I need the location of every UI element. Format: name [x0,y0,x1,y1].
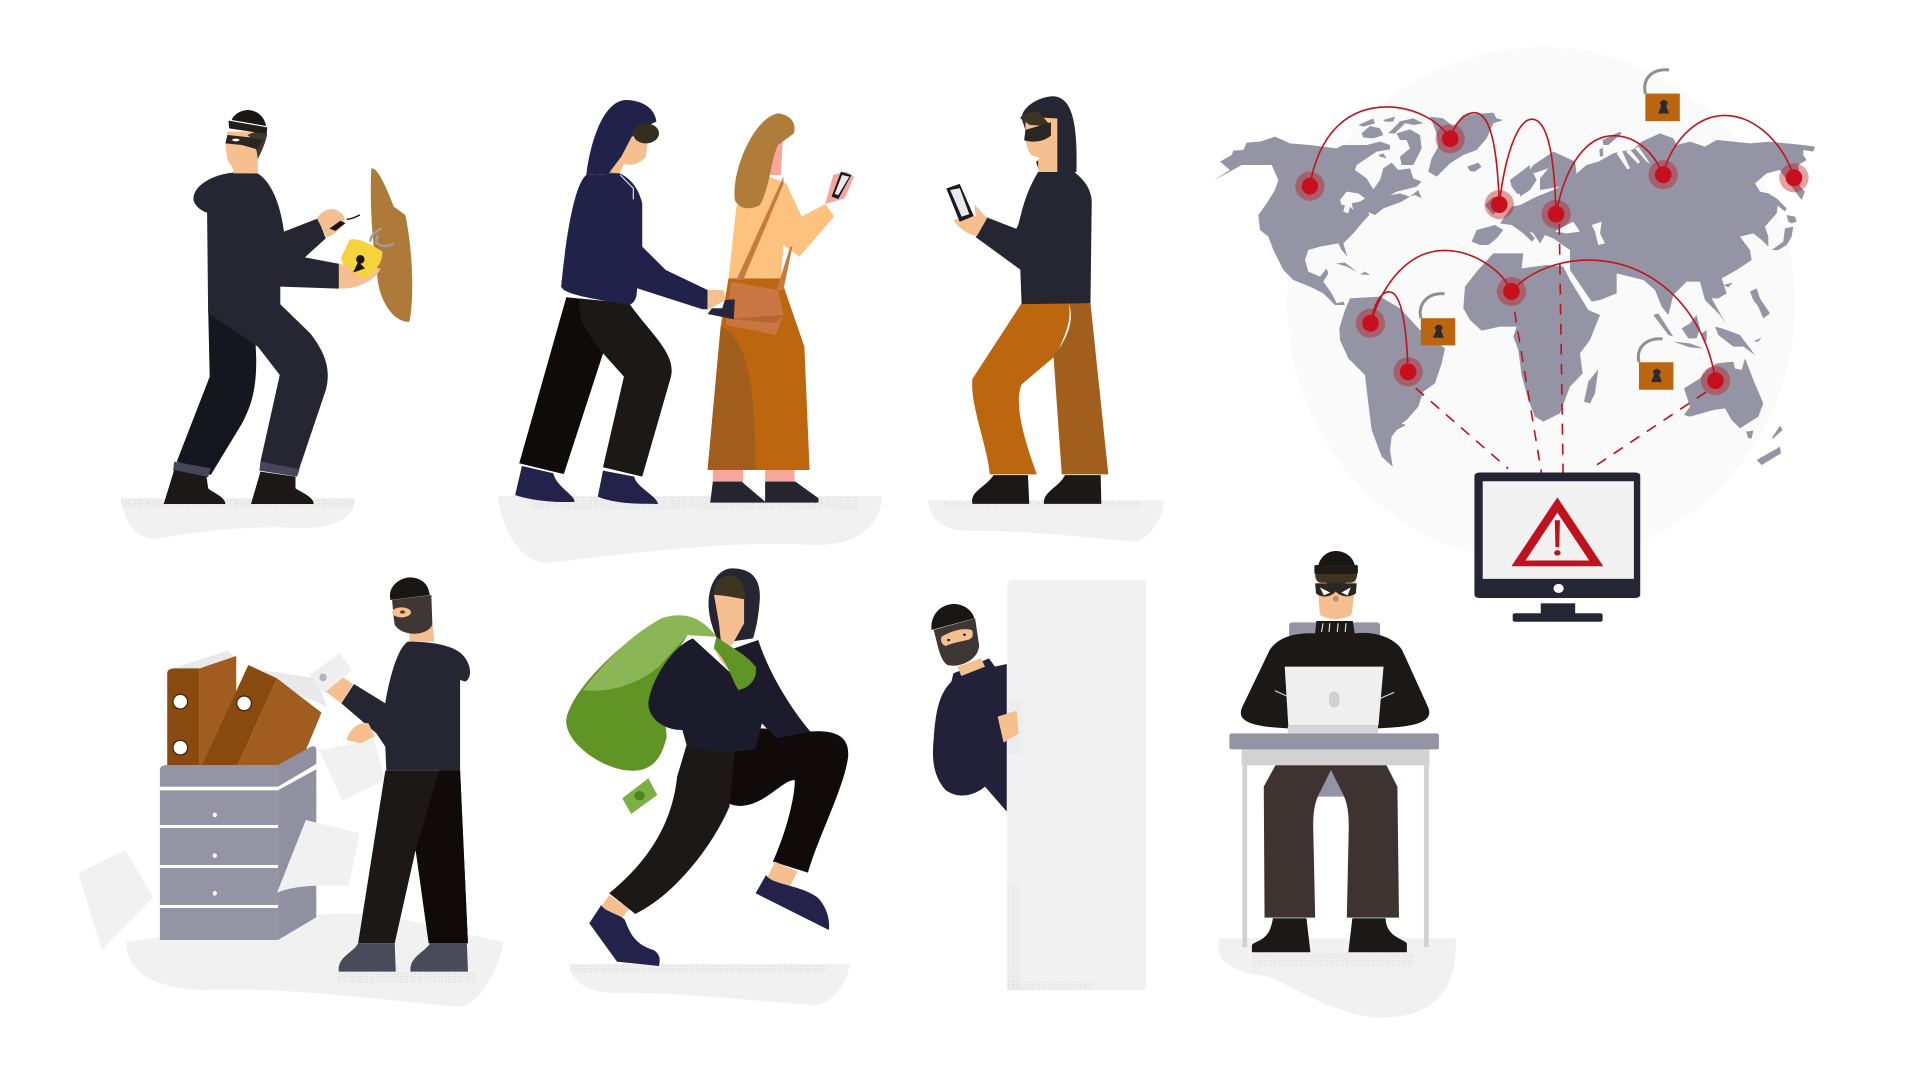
location markers [1295,124,1809,395]
attack network and monitor [1295,70,1809,622]
paper leaning on cabinet [277,820,360,893]
phone man [946,96,1108,504]
burglar figure [164,110,360,504]
ground shadow [126,913,504,1007]
scene: world map cyber attack [1214,47,1815,622]
hacker legs [1252,765,1407,952]
chair back [1289,622,1380,642]
world map [1214,113,1815,467]
scene: burglar picking a padlock [121,100,882,563]
papers in binders [172,651,327,707]
desk [1229,733,1439,947]
dashed connection lines to monitor [1416,224,1706,472]
hoodie body and head [648,568,811,752]
scene: thief at filing cabinet [78,568,850,1007]
hacker torso [1241,621,1429,728]
ground shadow [121,498,355,539]
monitor with warning sign [1474,472,1640,622]
ground shadow [570,964,850,1005]
chair seat [1315,770,1347,797]
money bag [566,615,716,771]
folders [167,656,322,768]
ground shadow [497,496,882,563]
running thief back parts [589,728,848,966]
door with hasp [371,168,412,322]
icon: open padlock top [1645,70,1680,121]
paper behind cabinet [319,740,385,801]
yellow padlock in hand [339,239,382,288]
thief reading a document [309,577,470,972]
hand on wall [998,711,1019,743]
laptop [1285,667,1384,733]
ground shadow [1218,938,1456,1018]
wall [1007,580,1146,990]
scene: thief peeking behind wall [931,551,1456,1018]
hacker head [1314,551,1358,619]
attack arcs [1310,107,1794,381]
woman with phone [708,113,854,503]
globe background [1287,47,1795,563]
hooded pickpocket [515,100,735,504]
wall grain shading [1007,883,1021,990]
padlock shackle [370,228,394,246]
icon: open padlock australia [1638,339,1673,390]
flying paper left [78,850,153,950]
scene: hooded man looking at phone [928,96,1164,541]
filing cabinet [160,746,316,940]
thief body [931,604,1007,812]
ground shadow [928,500,1164,541]
icon: open padlock south america [1420,294,1455,345]
falling banknote [622,778,657,814]
